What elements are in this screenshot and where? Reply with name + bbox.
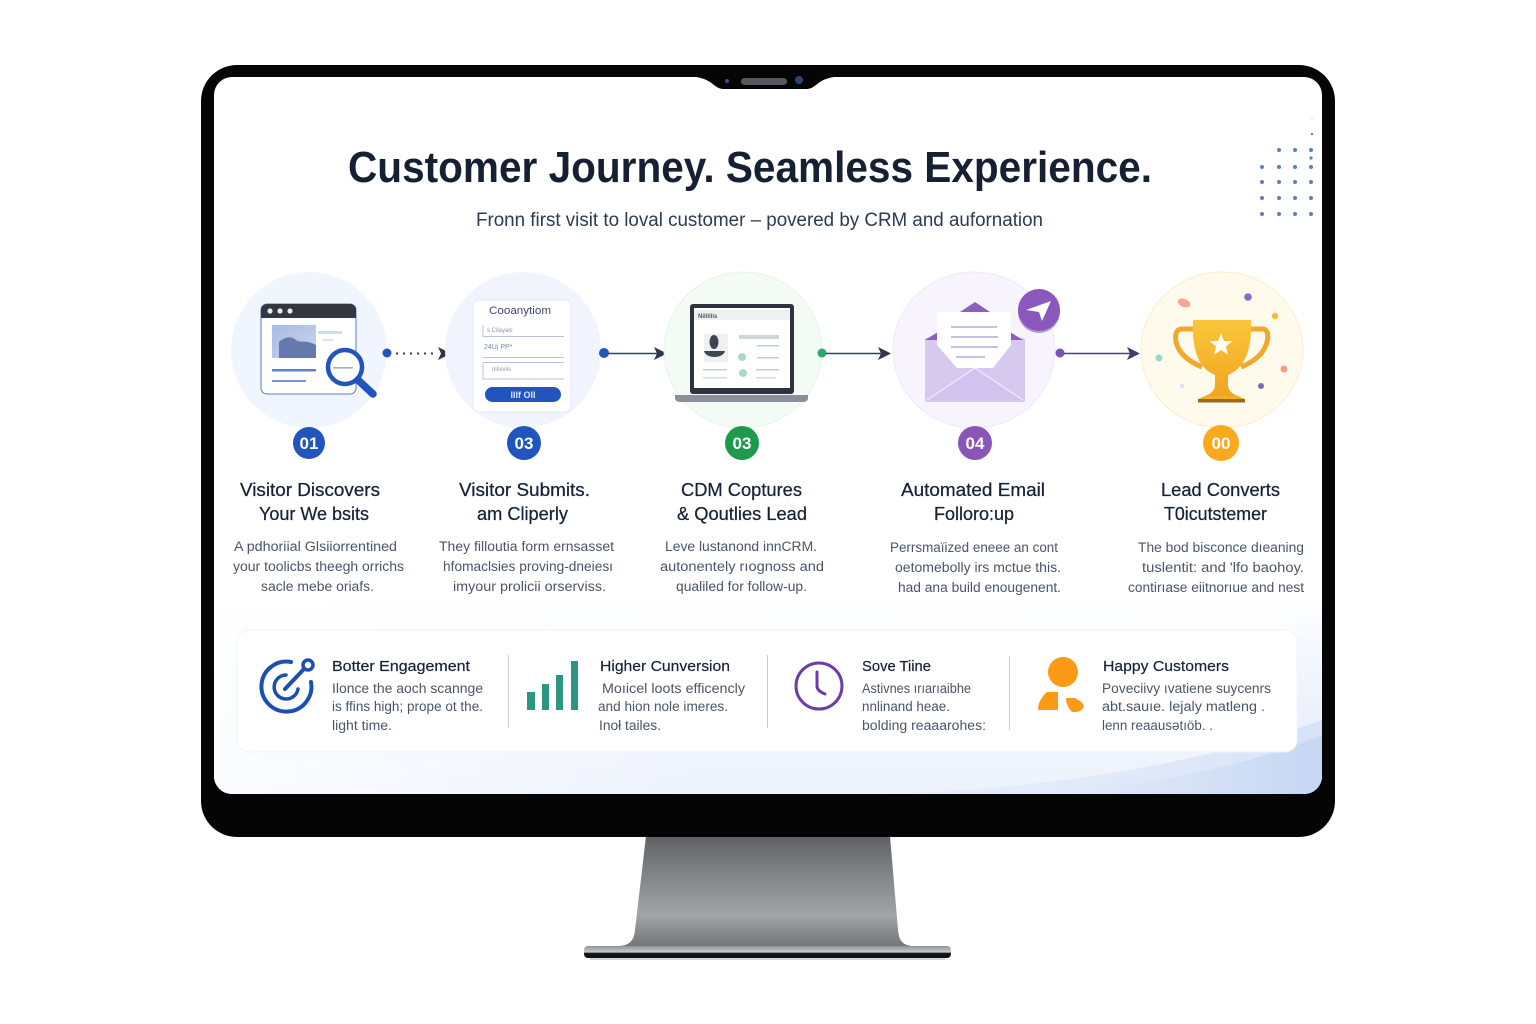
heading: CDM Coptures (681, 480, 802, 500)
description: The bod bisconce dıeaning (1138, 540, 1304, 555)
title: Customer Journey. Seamless Experience. (348, 143, 1152, 192)
arrow 1 to 2 (382, 347, 451, 360)
description: A pdhoriial Glsiiorrentined (234, 539, 397, 554)
number badge 03: 03 (515, 434, 533, 453)
benefit: save time: nnlinand heae. (862, 699, 950, 714)
heading: Your We bsits (259, 504, 369, 524)
monitor screen (214, 77, 1322, 794)
benefit: save time: bolding reaaarohes: (862, 718, 986, 733)
description (439, 539, 614, 594)
subtitle: Fronn first visit to loval customer – povered by CRM and aufornation (476, 210, 1043, 231)
panel: benefits (237, 630, 1297, 752)
icon: paper plane badge (1018, 289, 1060, 333)
decorative dot grid (1260, 117, 1313, 216)
description: imyour prolicii orserviss. (453, 579, 606, 594)
benefit: higher conversion: Moıicel loots efficencly (602, 681, 745, 696)
description: They filloutia form ernsasset (439, 539, 614, 554)
number badge 04 (958, 426, 992, 460)
icon: target (261, 660, 313, 712)
heading: Folloro:up (934, 504, 1014, 524)
heading: T0icutstemer (1164, 504, 1267, 524)
confetti (1156, 293, 1288, 389)
description (1128, 540, 1304, 595)
monitor infographic (201, 65, 1335, 960)
description (890, 540, 1061, 595)
number badge 03 (507, 426, 541, 460)
icon: trophy (1176, 320, 1268, 402)
arrow 4 to 5 (1056, 347, 1140, 360)
step 5: lead converts (1128, 272, 1304, 595)
benefit: save time (796, 658, 986, 733)
heading: Automated Email (901, 480, 1045, 500)
arrow 3 to 4 (818, 347, 891, 360)
description (660, 539, 824, 594)
icon: form card: 24Uj PP* (484, 344, 513, 351)
benefit: higher conversion: Inoł tailes. (599, 718, 661, 733)
icon: envelope (925, 302, 1025, 402)
icon: form card: riilsiviis (492, 367, 511, 373)
heading: & Qoutlies Lead (677, 504, 807, 524)
heading (901, 480, 1045, 524)
benefit: save time: Sove Tiine (862, 658, 931, 675)
number badge 00: 00 (1212, 434, 1230, 453)
benefit: higher conversion: Higher Cunversion (600, 658, 730, 675)
benefit: higher conversion: and hion nole imeres. (598, 699, 728, 714)
step 3: CRM captures (660, 272, 824, 594)
number badge 04: 04 (966, 434, 985, 453)
description: your toolicbs theegh orrichs (233, 559, 404, 574)
benefit: better engagement: Ilonce the aoch scannge (332, 681, 483, 696)
description: Leve lustanond innCRM. (665, 539, 817, 554)
benefit: better engagement: is ffins high; prope ot the. (332, 699, 483, 714)
heading (677, 480, 807, 524)
description: Perrsmaïized eneee an cont (890, 540, 1058, 555)
icon: form card: IIIf OII (510, 390, 536, 400)
description: autonentely rıognoss and (660, 559, 824, 574)
number badge 00 (1203, 425, 1239, 461)
description (233, 539, 404, 594)
heading (459, 480, 590, 524)
step 1: visitor discovers (231, 272, 404, 594)
arrow 2 to 3 (599, 347, 667, 360)
monitor bezel (201, 65, 1335, 837)
icon: laptop (675, 304, 808, 402)
camera notch (690, 76, 840, 89)
monitor stand (584, 836, 951, 960)
icon: bar chart (527, 661, 578, 710)
icon: form card (473, 300, 571, 412)
icon: laptop: Nilililis (698, 314, 718, 320)
description: had ana build enougenent. (898, 580, 1061, 595)
icon: form card: s Cilayais (487, 328, 513, 334)
step 4: automated email (890, 272, 1061, 595)
icon: clock (796, 663, 842, 709)
icon: person (1038, 657, 1084, 712)
benefit: happy customers: Happy Customers (1103, 658, 1229, 675)
description: tuslentit: and 'lfo baohoy. (1142, 560, 1304, 575)
benefit: higher conversion (527, 658, 745, 733)
number badge 03 (725, 426, 759, 460)
benefit: happy customers: Poveciivy ıvatiene suycenrs (1102, 681, 1271, 696)
benefit: save time: Astivnes ırıarıaibhe (862, 681, 971, 696)
benefit: happy customers (1038, 657, 1271, 733)
description: hfomaclsies proving-dneiesı (443, 559, 613, 574)
description: qualiled for follow-up. (676, 579, 807, 594)
step 2: visitor submits (439, 272, 614, 594)
description: sacle mebe oriafs. (261, 579, 374, 594)
description: contirıase eiitnorıue and nest (1128, 580, 1304, 595)
icon: browser with magnifier (261, 304, 373, 394)
benefit: better engagement (261, 658, 483, 733)
heading (240, 480, 380, 524)
description: oetomebolly irs mctue this. (895, 560, 1061, 575)
benefit: better engagement: Botter Engagement (332, 658, 471, 675)
heading (1161, 480, 1280, 524)
number badge 01: 01 (300, 434, 318, 453)
number badge 03: 03 (733, 434, 751, 453)
heading: am Cliperly (477, 504, 568, 524)
heading: Visitor Submits. (459, 480, 590, 500)
icon: form card: Cooanytiom (489, 305, 551, 317)
benefit: happy customers: lenn reaausətıöb. . (1102, 718, 1213, 733)
benefit: better engagement: light time. (332, 718, 392, 733)
number badge 01 (293, 427, 325, 459)
heading: Lead Converts (1161, 480, 1280, 500)
heading: Visitor Discovers (240, 480, 380, 500)
benefit: happy customers: abt.sauıe. lejaly matleng . (1102, 699, 1265, 714)
